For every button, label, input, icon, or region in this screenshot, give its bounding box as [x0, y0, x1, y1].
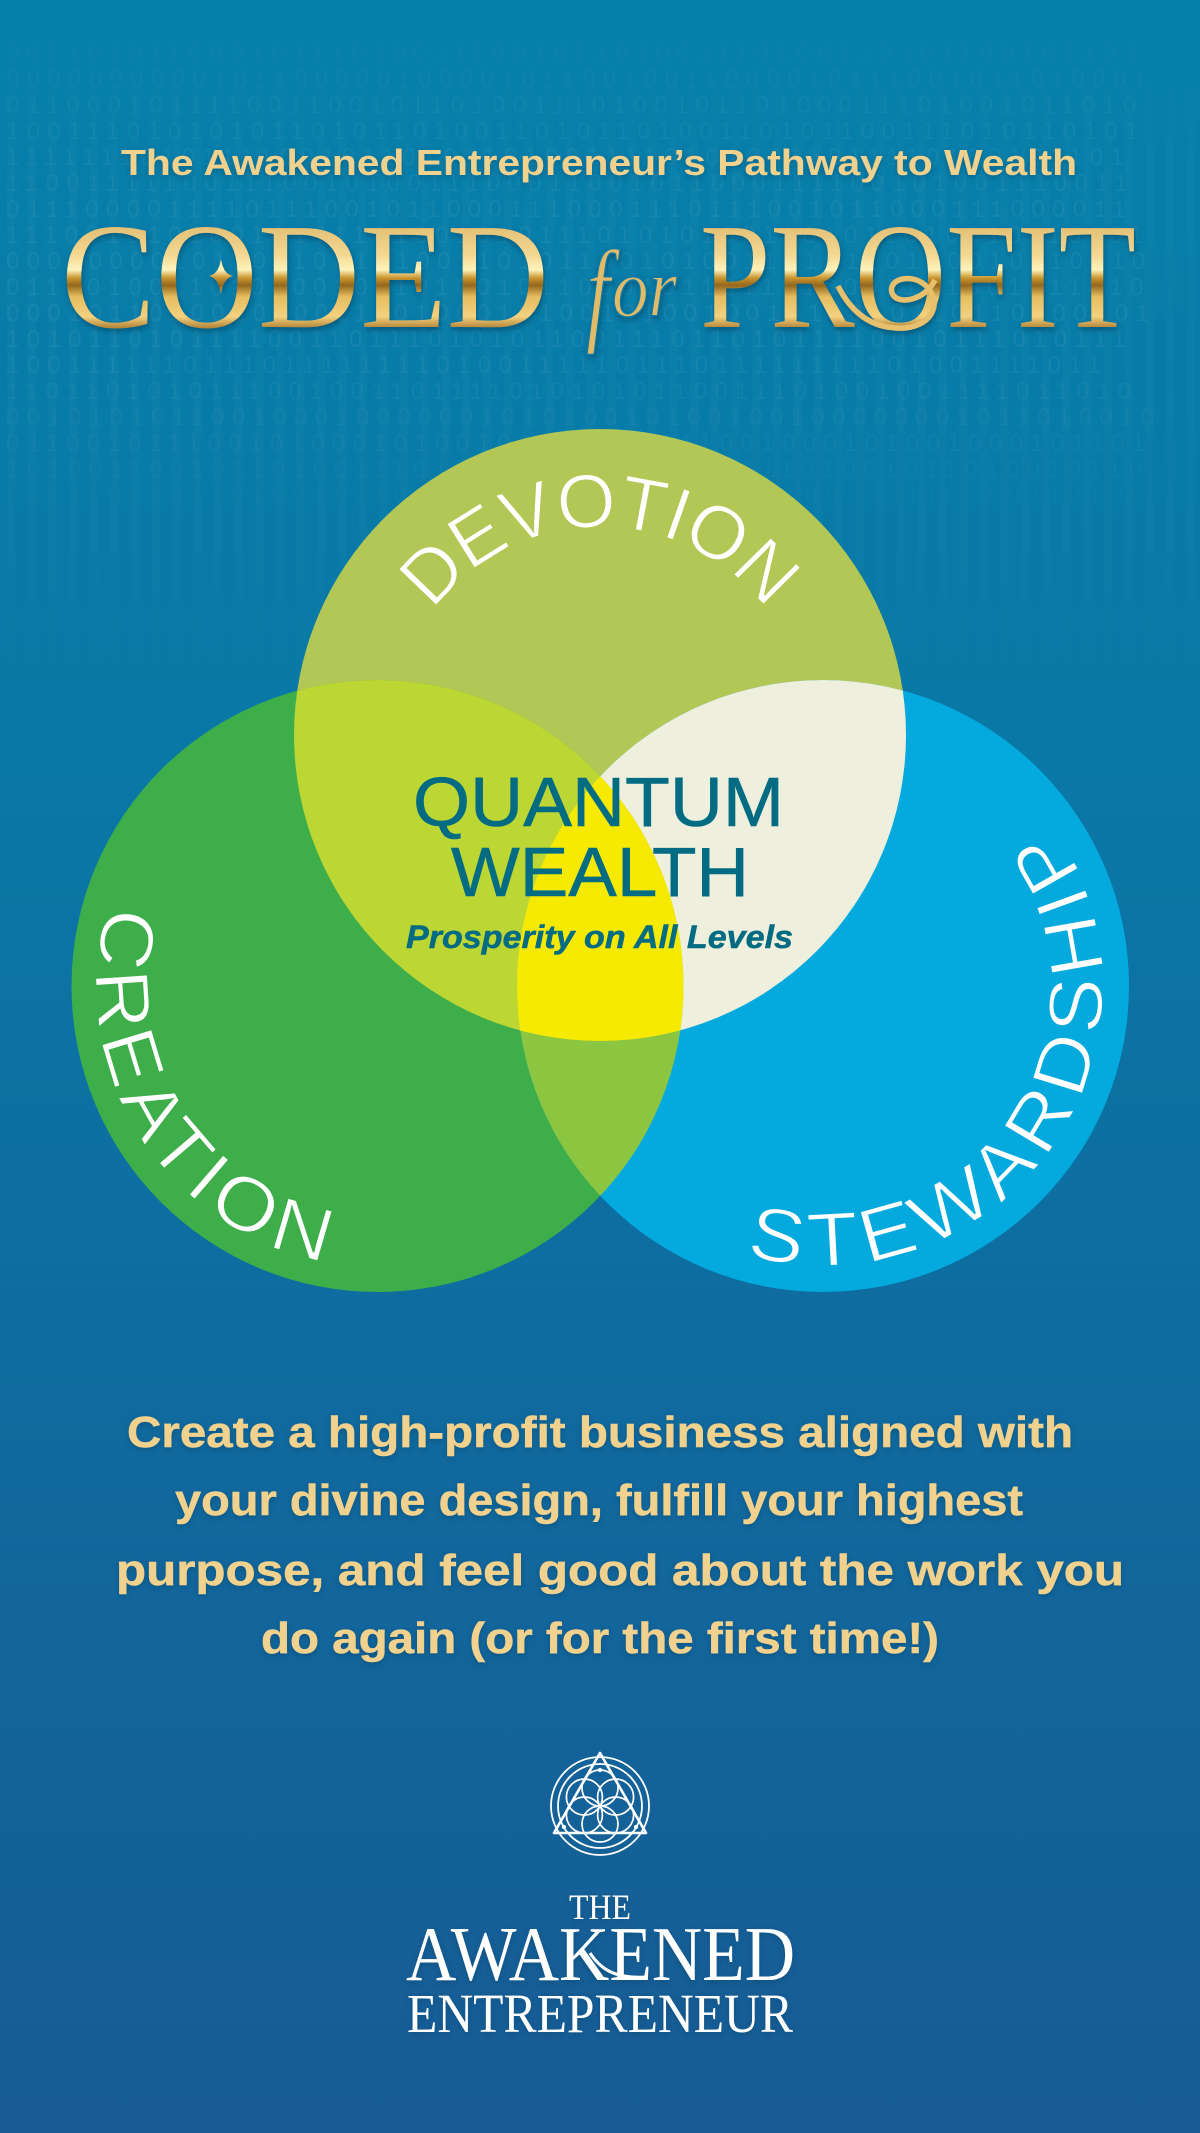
overlap: center — [517, 776, 684, 1041]
background binary code pattern: 01100010111100110010110100111010010110100011101001011010 — [6, 92, 1144, 119]
background binary code pattern: 11100101010010101101001010111010101001101011010010110101 — [6, 222, 1151, 249]
background binary code pattern: 10100110010110100111010010110101001011101001011010010110 — [6, 456, 1149, 483]
description paragraph: Create a high-profit business aligned with — [127, 1408, 1073, 1457]
overlap: devotion and creation — [294, 680, 600, 1030]
title word: CODED: CODED — [61, 192, 549, 360]
description paragraph: purpose, and feel good about the work you — [116, 1546, 1124, 1595]
background binary code pattern: 11111110101111001011010110100111101010011011110100101101 — [6, 144, 1131, 171]
circle: stewardship — [517, 680, 1129, 1292]
title flourish — [838, 278, 935, 328]
background binary code pattern: 01100100110101001011010010110001011011010001101001011010 — [6, 274, 1151, 301]
title word: for — [586, 228, 677, 356]
background binary code pattern: 10011101010101101011010011010110100110101100111010110101 — [6, 118, 1145, 145]
wordmark: THE: THE — [569, 1887, 631, 1927]
background binary code pattern: 11011010101110010011011110101010110011101001001111011010 — [6, 378, 1138, 405]
wordmark flourish on K — [590, 1953, 647, 1977]
label: STEWARDSHIP: STEWARDSHIP — [752, 846, 1102, 1265]
wordmark: ENTREPRENEUR: ENTREPRENEUR — [407, 1983, 793, 2044]
tagline: Prosperity on All Levels — [406, 919, 793, 955]
background binary code pattern: 10011111101110111111110100111110111011111111101001111011 — [6, 352, 1108, 379]
venn diagram — [72, 429, 1129, 1292]
background binary code pattern: 00010110100101001110100010100101001001010010110110100101 — [6, 300, 1156, 327]
title: Coded for Profit — [61, 192, 1136, 360]
subtitle: The Awakened Entrepreneur’s Pathway to Wealth — [121, 142, 1077, 183]
heading: WEALTH: WEALTH — [451, 833, 749, 911]
description paragraph: do again (or for the first time!) — [261, 1614, 939, 1663]
background binary code pattern: 10101101011110011011101010110011101101011110010111010111 — [6, 326, 1133, 353]
background binary code pattern: 00101010110010001000000101010010100100100000001011010010 — [6, 404, 1162, 431]
label: DEVOTION: DEVOTION — [400, 475, 800, 604]
title word: for: f — [586, 228, 620, 356]
background binary code pattern: 00000000001011000001000010110010011000010111001011010001 — [6, 66, 1154, 93]
overlap: creation and stewardship — [517, 776, 684, 1196]
description paragraph — [116, 1408, 1124, 1663]
title word: for: or — [612, 242, 677, 335]
background binary code pattern: 01100101110010100010100101110101011001000101001000101101 — [6, 430, 1153, 457]
background binary code pattern: 01110000111101110010110001110001110111001011000111000011 — [6, 196, 1133, 223]
circle: devotion — [294, 429, 906, 1041]
center text — [406, 763, 793, 955]
brand wordmark — [406, 1887, 795, 2044]
circle: creation — [72, 680, 684, 1292]
icon: sacred geometry logo — [551, 1753, 649, 1855]
label: CREATION: CREATION — [96, 914, 332, 1260]
overlap: devotion and stewardship — [517, 680, 906, 1030]
icon: star inside the O — [209, 259, 233, 294]
heading: QUANTUM: QUANTUM — [413, 763, 784, 841]
description paragraph: your divine design, fulfill your highest — [175, 1476, 1023, 1525]
background binary code pattern: 11001111100111001010011100011001011000111100101001110011 — [6, 170, 1135, 197]
background binary code pattern — [7, 96, 1153, 451]
background binary code pattern: 00010000101101100101001101011001010011010110100010110010 — [6, 248, 1153, 275]
wordmark: AWAKENED: AWAKENED — [406, 1911, 795, 1997]
